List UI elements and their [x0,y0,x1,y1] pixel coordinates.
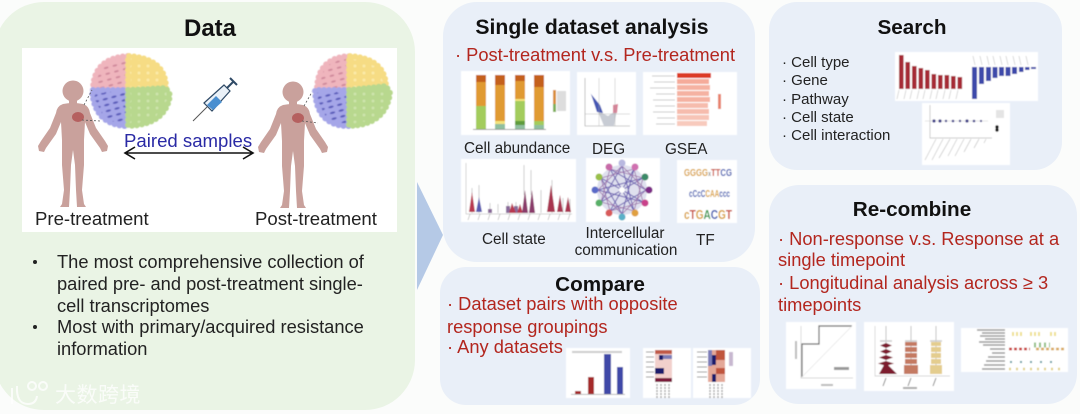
label: GSEA: GSEA [665,141,708,158]
chart: compare bars [566,348,630,398]
text block: search list: · Cell interaction [782,127,890,144]
text block: re-combine options [778,228,1060,315]
chart: compare heatmap 1 [643,348,691,398]
panel: compare [440,267,760,405]
subtitle: comparison: · Post-treatment v.s. Pre-treatment [455,44,735,65]
label: cell state: Cell state [482,231,546,248]
text block: search list: · Cell state [782,109,854,126]
text block: re-combine options: · Non-response v.s. Response at a [778,228,1060,249]
text block: compare options: response groupings [447,316,608,337]
panel: re-combine [769,185,1077,404]
heading: single dataset analysis: Single dataset analysis [475,16,709,39]
chart: search dot plot [922,103,1010,165]
chart: intercellular network [586,158,660,222]
text block: search list: · Pathway [782,91,849,108]
text block: re-combine options: timepoints [778,294,861,315]
panel: search [769,2,1062,170]
chart: TF motif logos: GGGGxTTCG [684,167,732,179]
chart: TF motif logos: cCcCCAAccc [689,189,730,200]
chart: GSEA [643,72,737,135]
text: watermark: 大数跨境 [55,379,141,409]
chart: compare heatmap 2 [693,348,751,398]
chart: TF motif logos [677,160,737,223]
chart: search bars [895,52,1038,101]
heading: compare: Compare [555,273,645,296]
chart: longitudinal violins [864,322,954,391]
text block: compare options [447,293,678,357]
label: pre-treatment: Pre-treatment [35,208,150,229]
text block: re-combine options: · Longitudinal analysis across ≥ 3 [778,272,1048,293]
text block: re-combine options: single timepoint [778,249,905,270]
panel: data [0,2,415,410]
text block: search list: · Gene [782,72,828,89]
text block: search list [782,54,890,144]
text block: data description [33,251,365,359]
arrow: data to analyses [417,182,443,290]
illustration: paired samples [22,48,397,232]
label: intercellular communication: communication [575,242,677,259]
icon: watermark logo [12,382,47,404]
icon: human figure post-treatment [258,82,328,208]
label: intercellular communication: Intercellular [585,225,665,242]
text block: compare options: · Dataset pairs with opposite [447,293,678,314]
text block: data description: paired pre- and post-treatment single- [57,273,363,294]
heading: search: Search [877,16,947,39]
text block: data description: The most comprehensive collection of [57,251,365,272]
chart: cell abundance [461,71,570,135]
text block: data description: Most with primary/acquired resistance [57,316,364,337]
chart: longitudinal dot heatmap [961,328,1068,372]
label: intercellular communication [575,225,677,259]
panel: single dataset analysis [443,2,755,262]
watermark [12,379,141,409]
text block: compare options: · Any datasets [447,336,563,357]
text block: data description: information [57,338,147,359]
label: post-treatment: Post-treatment [255,208,378,229]
label: cell abundance: Cell abundance [464,140,570,157]
arrow: paired samples [125,147,253,159]
heading: re-combine: Re-combine [853,198,971,221]
icon: tumour cell cluster pre-treatment [92,56,170,126]
text block: data description: cell transcriptomes [57,295,209,316]
heading: data: Data [184,15,237,42]
text block: search list: · Cell type [782,54,850,71]
chart: DEG volcano [577,72,636,135]
icon: tumour cell cluster post-treatment [315,56,390,126]
icon: syringe [193,78,237,121]
chart: TF motif logos: cTGACGT [684,208,732,222]
label: TF: TF [696,232,715,249]
icon: human figure pre-treatment [38,80,108,207]
chart: cell state violins [461,159,576,222]
label: paired samples: Paired samples [124,130,252,151]
chart: ROC curve [786,322,856,389]
label: DEG: DEG [592,141,625,158]
